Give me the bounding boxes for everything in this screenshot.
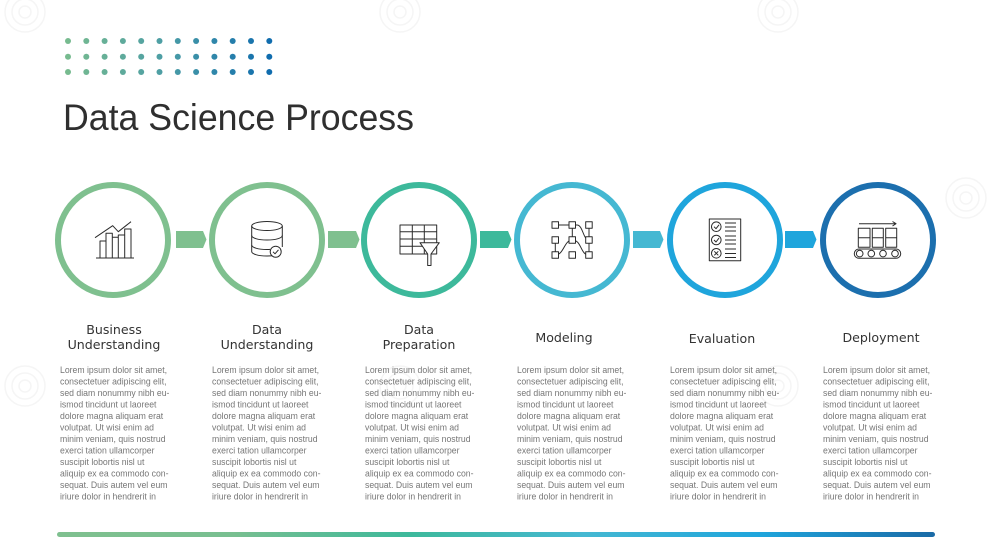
description: exerci tation ullamcorper bbox=[670, 445, 764, 456]
description: volutpat. Ut wisi enim ad bbox=[517, 422, 611, 433]
description: ismod tincidunt ut laoreet bbox=[670, 399, 767, 410]
icon: table with funnel bbox=[400, 225, 439, 266]
description: Lorem ipsum dolor sit amet, bbox=[60, 365, 167, 375]
description: volutpat. Ut wisi enim ad bbox=[60, 422, 154, 433]
description: iriure dolor in hendrerit in bbox=[212, 491, 308, 502]
description: minim veniam, quis nostrud bbox=[365, 434, 471, 444]
step 3: data preparation bbox=[364, 185, 474, 502]
description: sequat. Duis autem vel eum bbox=[517, 480, 625, 490]
description: consectetuer adipiscing elit, bbox=[823, 376, 930, 387]
description: sequat. Duis autem vel eum bbox=[670, 480, 778, 490]
icon: network of nodes bbox=[552, 222, 592, 258]
description: sequat. Duis autem vel eum bbox=[60, 480, 168, 490]
heading: Data bbox=[404, 322, 434, 337]
description: aliquip ex ea commodo con- bbox=[670, 468, 778, 479]
description: consectetuer adipiscing elit, bbox=[365, 376, 472, 387]
heading: Deployment bbox=[842, 330, 920, 345]
description: exerci tation ullamcorper bbox=[60, 445, 154, 456]
heading: Modeling bbox=[535, 330, 593, 345]
description: iriure dolor in hendrerit in bbox=[517, 491, 613, 502]
step 6: deployment bbox=[823, 185, 933, 502]
description: dolore magna aliquam erat bbox=[60, 411, 164, 421]
description: dolore magna aliquam erat bbox=[212, 411, 316, 421]
description: Lorem ipsum dolor sit amet, bbox=[365, 365, 472, 375]
description: consectetuer adipiscing elit, bbox=[212, 376, 319, 387]
title: Data Science Process bbox=[63, 97, 414, 138]
description: volutpat. Ut wisi enim ad bbox=[670, 422, 764, 433]
description: suscipit lobortis nisl ut bbox=[365, 457, 450, 467]
description: exerci tation ullamcorper bbox=[823, 445, 917, 456]
description: minim veniam, quis nostrud bbox=[517, 434, 623, 444]
description: sed diam nonummy nibh eu- bbox=[212, 388, 321, 398]
arrow 5 bbox=[785, 231, 816, 248]
description: consectetuer adipiscing elit, bbox=[517, 376, 624, 387]
circle 1 bbox=[58, 185, 168, 295]
circle 6 bbox=[823, 185, 933, 295]
description: sed diam nonummy nibh eu- bbox=[60, 388, 169, 398]
description: aliquip ex ea commodo con- bbox=[517, 468, 625, 479]
description: suscipit lobortis nisl ut bbox=[60, 457, 145, 467]
step 1: business understanding bbox=[58, 185, 169, 502]
description: suscipit lobortis nisl ut bbox=[823, 457, 908, 467]
step 2: data understanding bbox=[212, 185, 322, 502]
description: sed diam nonummy nibh eu- bbox=[365, 388, 474, 398]
icon: bar chart with trend line bbox=[95, 222, 134, 258]
description: iriure dolor in hendrerit in bbox=[823, 491, 919, 502]
heading: Understanding bbox=[221, 337, 313, 352]
bottom gradient bar bbox=[57, 532, 935, 537]
description: iriure dolor in hendrerit in bbox=[60, 491, 156, 502]
description: suscipit lobortis nisl ut bbox=[517, 457, 602, 467]
description: dolore magna aliquam erat bbox=[517, 411, 621, 421]
heading: Preparation bbox=[383, 337, 455, 352]
description: iriure dolor in hendrerit in bbox=[670, 491, 766, 502]
dot grid decoration bbox=[65, 38, 272, 75]
arrow 1 bbox=[176, 231, 206, 248]
circle 5 bbox=[670, 185, 780, 295]
description: sed diam nonummy nibh eu- bbox=[823, 388, 932, 398]
description: exerci tation ullamcorper bbox=[365, 445, 459, 456]
description: volutpat. Ut wisi enim ad bbox=[212, 422, 306, 433]
description: aliquip ex ea commodo con- bbox=[60, 468, 168, 479]
description: ismod tincidunt ut laoreet bbox=[212, 399, 309, 410]
description: aliquip ex ea commodo con- bbox=[823, 468, 931, 479]
heading: Evaluation bbox=[689, 331, 755, 346]
description: sed diam nonummy nibh eu- bbox=[517, 388, 626, 398]
description: consectetuer adipiscing elit, bbox=[60, 376, 167, 387]
description: suscipit lobortis nisl ut bbox=[212, 457, 297, 467]
step 5: evaluation bbox=[670, 185, 780, 502]
description: dolore magna aliquam erat bbox=[823, 411, 927, 421]
description: dolore magna aliquam erat bbox=[670, 411, 774, 421]
description: ismod tincidunt ut laoreet bbox=[823, 399, 920, 410]
arrow 4 bbox=[633, 231, 664, 248]
arrow 3 bbox=[480, 231, 512, 248]
description: ismod tincidunt ut laoreet bbox=[60, 399, 157, 410]
description: minim veniam, quis nostrud bbox=[60, 434, 166, 444]
description: Lorem ipsum dolor sit amet, bbox=[670, 365, 777, 375]
heading: Understanding bbox=[68, 337, 160, 352]
description: minim veniam, quis nostrud bbox=[823, 434, 929, 444]
description: exerci tation ullamcorper bbox=[517, 445, 611, 456]
step 4: modeling bbox=[517, 185, 627, 502]
description: consectetuer adipiscing elit, bbox=[670, 376, 777, 387]
description: Lorem ipsum dolor sit amet, bbox=[517, 365, 624, 375]
heading: Data bbox=[252, 322, 282, 337]
icon: conveyor belt bbox=[854, 222, 901, 258]
circle 3 bbox=[364, 185, 474, 295]
description: sequat. Duis autem vel eum bbox=[212, 480, 320, 490]
description: dolore magna aliquam erat bbox=[365, 411, 469, 421]
description: volutpat. Ut wisi enim ad bbox=[365, 422, 459, 433]
description: sequat. Duis autem vel eum bbox=[365, 480, 473, 490]
description: minim veniam, quis nostrud bbox=[212, 434, 318, 444]
icon: checklist document bbox=[709, 219, 741, 261]
description: aliquip ex ea commodo con- bbox=[365, 468, 473, 479]
circle 2 bbox=[212, 185, 322, 295]
description: ismod tincidunt ut laoreet bbox=[365, 399, 462, 410]
description: minim veniam, quis nostrud bbox=[670, 434, 776, 444]
description: sequat. Duis autem vel eum bbox=[823, 480, 931, 490]
description: suscipit lobortis nisl ut bbox=[670, 457, 755, 467]
circle 4 bbox=[517, 185, 627, 295]
description: exerci tation ullamcorper bbox=[212, 445, 306, 456]
icon: database with check bbox=[252, 222, 282, 257]
arrow 2 bbox=[328, 231, 360, 248]
description: aliquip ex ea commodo con- bbox=[212, 468, 320, 479]
description: Lorem ipsum dolor sit amet, bbox=[212, 365, 319, 375]
description: iriure dolor in hendrerit in bbox=[365, 491, 461, 502]
description: volutpat. Ut wisi enim ad bbox=[823, 422, 917, 433]
description: sed diam nonummy nibh eu- bbox=[670, 388, 779, 398]
description: ismod tincidunt ut laoreet bbox=[517, 399, 614, 410]
description: Lorem ipsum dolor sit amet, bbox=[823, 365, 930, 375]
heading: Business bbox=[86, 322, 142, 337]
